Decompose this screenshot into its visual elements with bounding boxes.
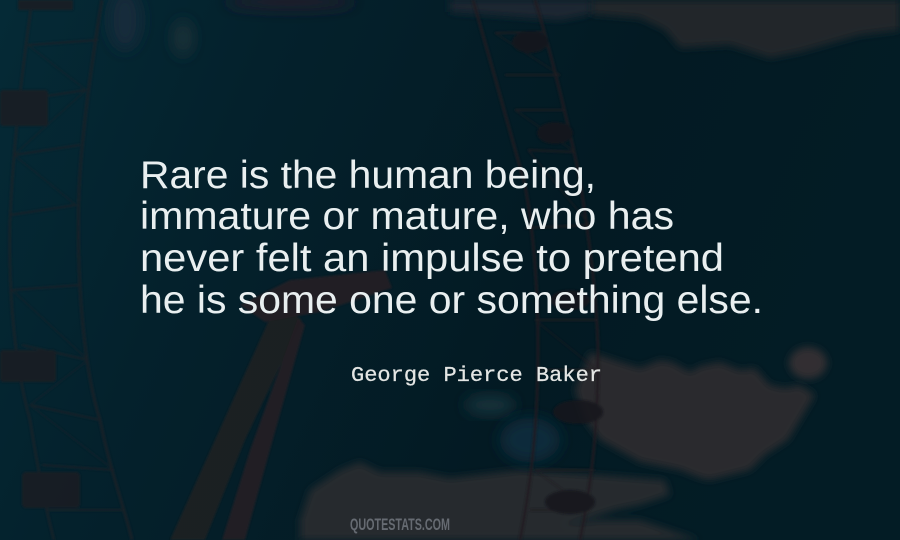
cloud: top right band (590, 0, 900, 58)
cloud: centre blue haze (465, 395, 515, 415)
ferris wheel: centre arc (473, 0, 603, 540)
quote text: he is some one or something else. (140, 279, 763, 322)
cloud: top left wisps (109, 0, 355, 56)
author name: George Pierce Baker (351, 365, 602, 388)
ferris wheel: spokes and hub (170, 270, 392, 540)
quote text (140, 154, 763, 322)
cloud: centre right large (575, 352, 815, 480)
cloud: small right puff (789, 347, 827, 379)
ferris wheel: left arc (0, 0, 132, 540)
watermark: QUOTESTATS.COM (350, 515, 450, 534)
cloud: bottom band (300, 462, 700, 540)
ferris wheel: centre pods (512, 31, 603, 514)
quote text: immature or mature, who has (140, 195, 674, 238)
ferris wheel: left pods (0, 0, 80, 508)
quote text: Rare is the human being, (140, 154, 596, 197)
quote text: never felt an impulse to pretend (140, 237, 724, 280)
